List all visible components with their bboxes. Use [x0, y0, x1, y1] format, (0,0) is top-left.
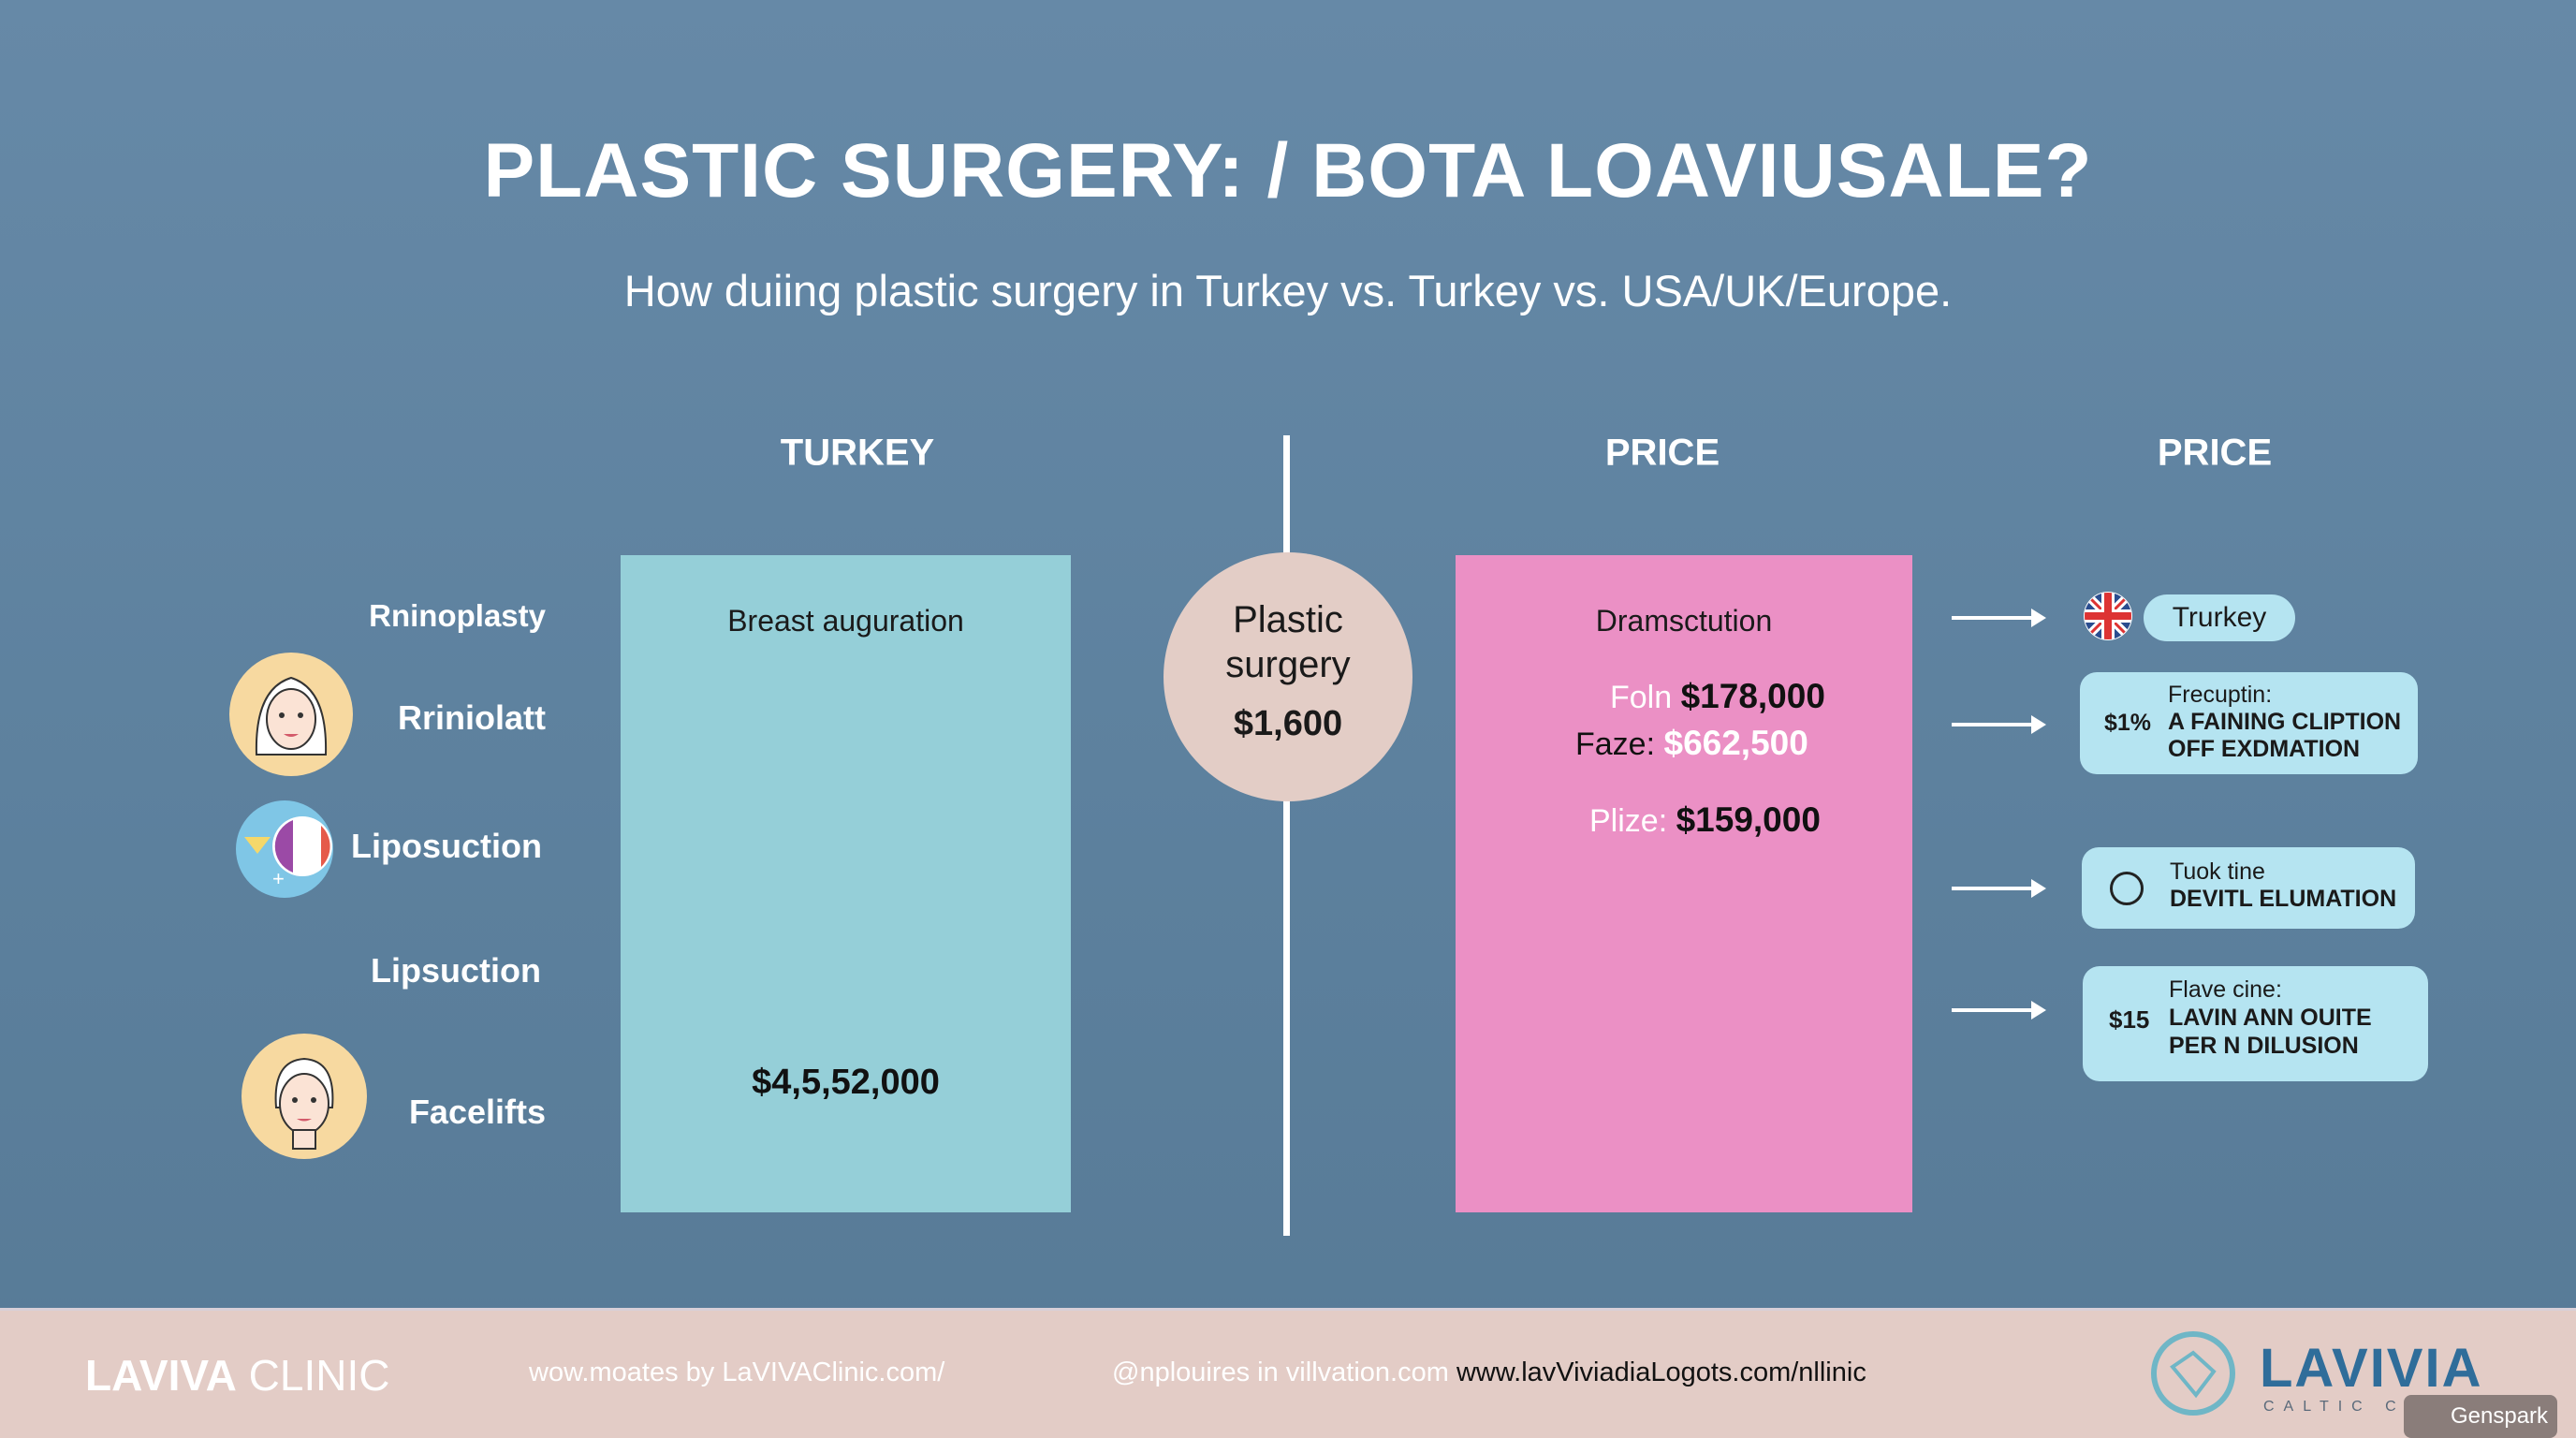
icon: woman face 2 — [242, 1034, 367, 1159]
label: Facelifts: Facelifts — [409, 1093, 546, 1131]
text: dramsctution: Dramsctution — [1596, 604, 1772, 638]
icon: uk flag — [2084, 592, 2132, 640]
circle: plastic surgery: $1,600 — [1234, 704, 1342, 743]
header: price 2: PRICE — [2158, 433, 2272, 474]
icon: woman face — [229, 653, 353, 776]
label: Rriniolatt: Rriniolatt — [398, 698, 546, 737]
panel: turkey cyan — [621, 555, 1071, 1212]
footer link 2: @nplouires in villvation.com www.lavViviadiaLogots.com/nllinic — [1112, 1357, 1866, 1387]
label: Liposuction: Liposuction — [351, 827, 542, 865]
divider line — [1283, 435, 1290, 1236]
callout box 2: OFF EXDMATION — [2168, 736, 2360, 762]
callout box 2: Frecuptin: — [2168, 682, 2272, 708]
callout box 4: $15 — [2109, 1005, 2149, 1034]
subtitle: How duiing plastic surgery in Turkey vs. Turkey vs. USA/UK/Europe. — [624, 266, 1952, 315]
callout box 4: LAVIN ANN OUITE — [2169, 1005, 2372, 1031]
header: turkey: TURKEY — [781, 433, 934, 474]
callout box 3 — [2082, 847, 2415, 929]
logo: LAVIVIA — [2260, 1338, 2482, 1399]
row: Plize: Plize: $159,000 — [1589, 800, 1821, 839]
logo — [2151, 1331, 2482, 1416]
label: Lipsuction: Lipsuction — [371, 951, 541, 990]
callout box 4: PER N DILUSION — [2169, 1033, 2359, 1059]
icon: liposuction — [236, 800, 333, 898]
arrow 3 — [1952, 887, 2042, 890]
arrow 2 — [1952, 723, 2042, 726]
callout box 2: A FAINING CLIPTION — [2168, 709, 2401, 735]
procedure labels — [351, 598, 546, 1131]
label: Rninoplasty: Rninoplasty — [369, 598, 546, 633]
callout box 3: DEVITL ELUMATION — [2170, 886, 2396, 912]
pill: turkey — [2144, 594, 2295, 641]
row: Foln: Foln $178,000 — [1610, 677, 1825, 715]
footer — [0, 1308, 2576, 1438]
circle: plastic surgery: surgery — [1225, 644, 1351, 685]
icon: clock — [2110, 872, 2144, 905]
row: Faze: Faze: $662,500 — [1575, 724, 1808, 762]
logo: CALTIC CLIS — [2263, 1399, 2456, 1415]
callout box 4 — [2083, 966, 2428, 1081]
panel: price pink — [1456, 555, 1912, 1212]
header: price: PRICE — [1605, 433, 1720, 474]
icon: liposuction: + — [272, 867, 285, 890]
footer brand: LAVIVA CLINIC — [85, 1351, 389, 1400]
circle: plastic surgery — [1164, 552, 1412, 801]
callout box 4: Flave cine: — [2169, 976, 2282, 1003]
pill: turkey: Trurkey — [2173, 602, 2266, 633]
circle: plastic surgery: Plastic — [1233, 599, 1343, 640]
text: breast auguration: Breast auguration — [727, 604, 964, 638]
arrow 4 — [1952, 1008, 2042, 1012]
title: PLASTIC SURGERY: / BOTA LOAVIUSALE? — [483, 128, 2093, 213]
watermark — [2404, 1395, 2557, 1438]
arrow 1 — [1952, 616, 2042, 620]
footer link 1: wow.moates by LaVIVAClinic.com/ — [529, 1357, 944, 1387]
price: turkey: $4,5,52,000 — [752, 1063, 940, 1102]
callout box 2 — [2080, 672, 2418, 774]
callout box 2: $1% — [2104, 710, 2151, 736]
price rows — [1575, 677, 1825, 839]
watermark: Genspark — [2451, 1403, 2548, 1429]
callout box 3: Tuok tine — [2170, 858, 2265, 885]
